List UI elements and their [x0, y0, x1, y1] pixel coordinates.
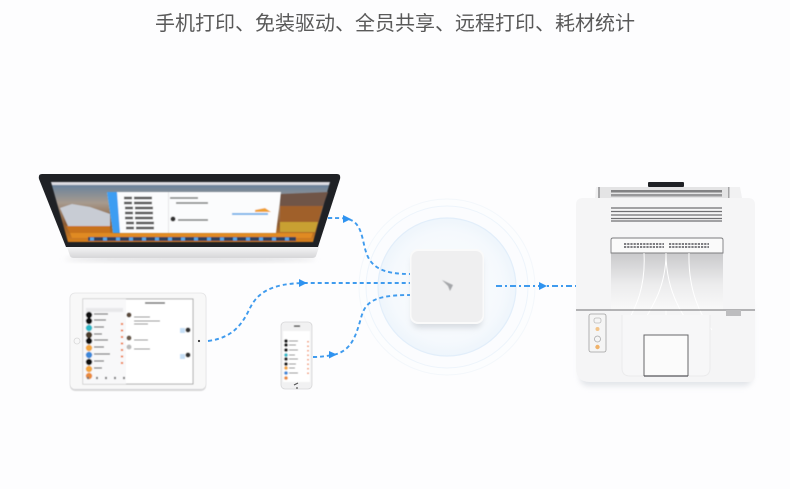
icon: printer: [576, 182, 755, 386]
arrow head: phone: [329, 351, 337, 358]
arrow head: tablet: [299, 279, 307, 287]
tablet screen: [83, 299, 193, 384]
arrow head: monitor: [343, 215, 351, 223]
printer control panel: [589, 314, 606, 352]
icon: desktop monitor: [39, 174, 340, 262]
printer output tray: [611, 238, 723, 375]
printer paper tray: [622, 315, 710, 376]
phone screen: [283, 326, 310, 382]
monitor wallpaper: [51, 182, 330, 242]
hub logo: [442, 280, 453, 291]
printer vents: [611, 208, 722, 221]
arrow: hub to printer: [496, 285, 576, 287]
wireless halo: [359, 199, 535, 375]
printer top feeder: [595, 187, 742, 198]
arrow: tablet to hub: [208, 283, 410, 341]
icon: phone: [281, 322, 312, 389]
title: 手机打印、免装驱动、全员共享、远程打印、耗材统计: [155, 13, 635, 35]
arrow: phone to hub: [313, 295, 410, 357]
printer handle: [648, 182, 684, 187]
printer seam: [576, 309, 755, 311]
monitor chat window: [107, 192, 281, 233]
icon: tablet: [70, 293, 206, 391]
icon: hub device: [410, 249, 484, 328]
arrow head: output: [539, 282, 547, 290]
printer body: [576, 198, 755, 382]
arrow: monitor to hub: [328, 218, 410, 274]
